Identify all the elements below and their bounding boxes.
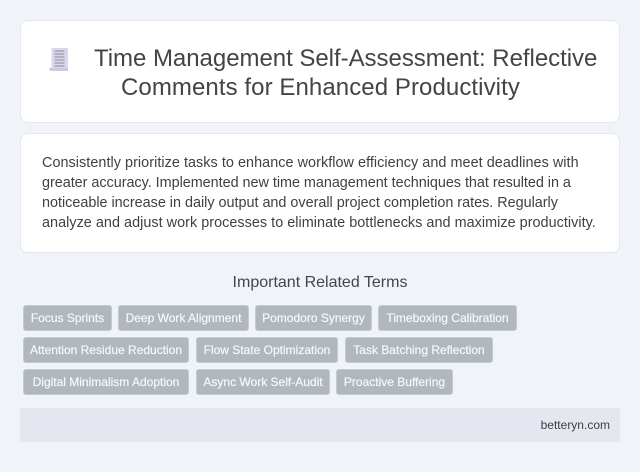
tag: Proactive Buffering [344,375,445,389]
tag: Task Batching Reflection [353,343,485,357]
description text: noticeable increase in daily output and overall project completion rates. Regularly [42,195,558,211]
tag: Timeboxing Calibration [386,311,509,325]
tag: Async Work Self-Audit [203,375,323,389]
header panel [20,20,620,123]
tag: Flow State Optimization [204,343,330,357]
icon: document scroll [49,48,68,71]
title line 1: Time Management Self-Assessment: Reflective [94,45,597,72]
tag: Deep Work Alignment [126,311,241,325]
tag [23,305,112,331]
tag [23,337,189,363]
tag [336,369,453,395]
tag [196,337,338,363]
description text: analyze and adjust work processes to eliminate bottlenecks and maximize productivity. [42,215,596,231]
description text: Consistently prioritize tasks to enhance workflow efficiency and meet deadlines with [42,155,579,171]
tag [118,305,249,331]
footer source text: betteryn.com [541,418,610,432]
tag [255,305,372,331]
tag [196,369,330,395]
tag: Attention Residue Reduction [30,343,182,357]
description text: greater accuracy. Implemented new time management techniques that resulted in a [42,175,571,191]
tag [378,305,517,331]
tag: Focus Sprints [31,311,104,325]
tag [23,369,189,395]
description text [42,155,596,231]
related terms heading: Important Related Terms [233,274,407,291]
footer bar [20,408,620,442]
tag: Digital Minimalism Adoption [33,375,179,389]
title line 2: Comments for Enhanced Productivity [121,74,520,101]
tag [345,337,493,363]
description panel [20,133,620,253]
tag: Pomodoro Synergy [262,311,365,325]
